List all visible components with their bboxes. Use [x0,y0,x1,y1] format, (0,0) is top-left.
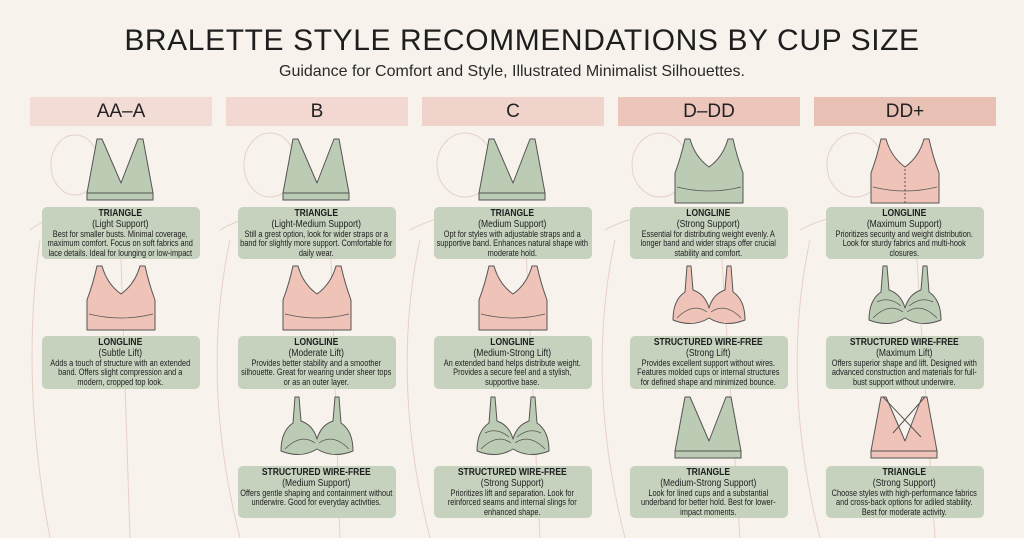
card D-DD triangle: Look for lined cups and a substantial underband for better hold. Best for lower-impact moments. [641,488,776,517]
card C structured: STRUCTURED WIRE-FREE [458,467,567,478]
card C longline: An extended band helps distribute weight. Provides a secure feel and a stylish, supportive base. [444,358,581,387]
card C triangle: TRIANGLE [490,208,534,219]
header: AA-A [30,97,212,126]
card D-DD longline: Essential for distributing weight evenly. A longer band and wider straps offer crucial stability and comfort. [641,229,776,258]
card DD+ longline [826,207,984,259]
card C triangle [434,207,592,259]
header: DD+: DD+ [886,101,924,122]
card B wire-free: STRUCTURED WIRE-FREE [262,467,371,478]
bra AA-A longline [86,266,156,330]
card DD+ longline: (Maximum Support) [867,219,942,230]
card AA-A longline: LONGLINE [98,337,142,348]
card DD+ triangle: (Strong Support) [873,478,936,489]
card B longline [238,336,396,389]
title: BRALETTE STYLE RECOMMENDATIONS BY CUP SIZE [124,24,920,57]
card C structured: (Strong Support) [481,478,544,489]
header: B: B [311,101,323,122]
card B triangle: TRIANGLE [294,208,338,219]
card AA-A longline [42,336,200,389]
subtitle: Guidance for Comfort and Style, Illustrated Minimalist Silhouettes. [279,63,745,80]
card D-DD wire-free: STRUCTURED WIRE-FREE [654,337,763,348]
card D-DD longline: LONGLINE [686,208,730,219]
card DD+ structured: Offers superior shape and lift. Designed with advanced construction and materials for full-bust support without underwire. [832,358,977,387]
card AA-A longline: (Subtle Lift) [98,348,142,359]
card C triangle: (Medium Support) [478,219,546,230]
card B wire-free: (Medium Support) [282,478,350,489]
bra B longline [282,266,352,330]
card DD+ triangle [826,466,984,518]
card B longline: LONGLINE [294,337,338,348]
card C longline [434,336,592,389]
card D-DD triangle: TRIANGLE [686,467,730,478]
header: AA-A: AA–A [97,101,145,122]
card DD+ structured: (Maximum Lift) [876,348,932,359]
bra C structured [476,396,550,455]
bra B wire-free [280,396,354,455]
bra D-DD longline [674,138,744,204]
card D-DD wire-free [630,336,788,389]
header: DD+ [814,97,996,126]
card D-DD longline: (Strong Support) [677,219,740,230]
bra B triangle [282,138,350,200]
bra C longline [478,266,548,330]
card B longline: Provides better stability and a smoother silhouette. Great for wearing under sheer tops or as an outer layer. [241,358,391,387]
card D-DD longline [630,207,788,259]
card AA-A triangle: TRIANGLE [98,208,142,219]
bra DD+ triangle cross-back [870,396,938,458]
card B wire-free [238,466,396,518]
card C triangle: Opt for styles with adjustable straps and a supportive band. Enhances natural shape with moderate hold. [437,229,588,258]
card B longline: (Moderate Lift) [289,348,344,359]
card C structured: Prioritizes lift and separation. Look for reinforced seams and internal slings for enhanced shape. [448,488,577,517]
header: D-DD: D–DD [683,101,735,122]
bra DD+ structured [868,266,942,324]
card DD+ longline: LONGLINE [882,208,926,219]
card AA-A longline: Adds a touch of structure with an extended band. Offers slight compression and a modern, cropped top look. [50,358,190,387]
card DD+ triangle: Choose styles with high-performance fabrics and cross-back options for adiled stability. Best for moderate activity. [832,488,977,517]
card B wire-free: Offers gentle shaping and containment without underwire. Good for everyday activities. [240,488,392,507]
card C structured [434,466,592,518]
bra DD+ longline [870,138,940,204]
header: B [226,97,408,126]
card D-DD wire-free: (Strong Lift) [686,348,731,359]
bra D-DD triangle [674,396,742,458]
header: C: C [506,101,520,122]
bra C triangle [478,138,546,200]
card B triangle: Still a grest option, look for wider straps or a band for slightly more support. Comfortable for daily wear. [240,229,392,258]
bra D-DD wire-free [672,266,746,324]
card C longline: (Medium-Strong Lift) [473,348,551,359]
card AA-A triangle [42,207,200,259]
card AA-A triangle: (Light Support) [92,219,148,230]
header: D-DD [618,97,800,126]
card D-DD triangle [630,466,788,518]
card B triangle: (Light-Medium Support) [272,219,361,230]
card DD+ structured [826,336,984,389]
card DD+ longline: Prioritizes security and weight distribution. Look for sturdy fabrics and multi-hook closures. [836,229,973,258]
card D-DD triangle: (Medium-Strong Support) [660,478,756,489]
card C longline: LONGLINE [490,337,534,348]
header: C [422,97,604,126]
card DD+ structured: STRUCTURED WIRE-FREE [850,337,959,348]
card D-DD wire-free: Provides excellent support without wires. Features molded cups or internal structures for defined shape and minimized bounce. [637,358,779,387]
card B triangle [238,207,396,259]
card DD+ triangle: TRIANGLE [882,467,926,478]
bra AA-A triangle [86,138,154,200]
